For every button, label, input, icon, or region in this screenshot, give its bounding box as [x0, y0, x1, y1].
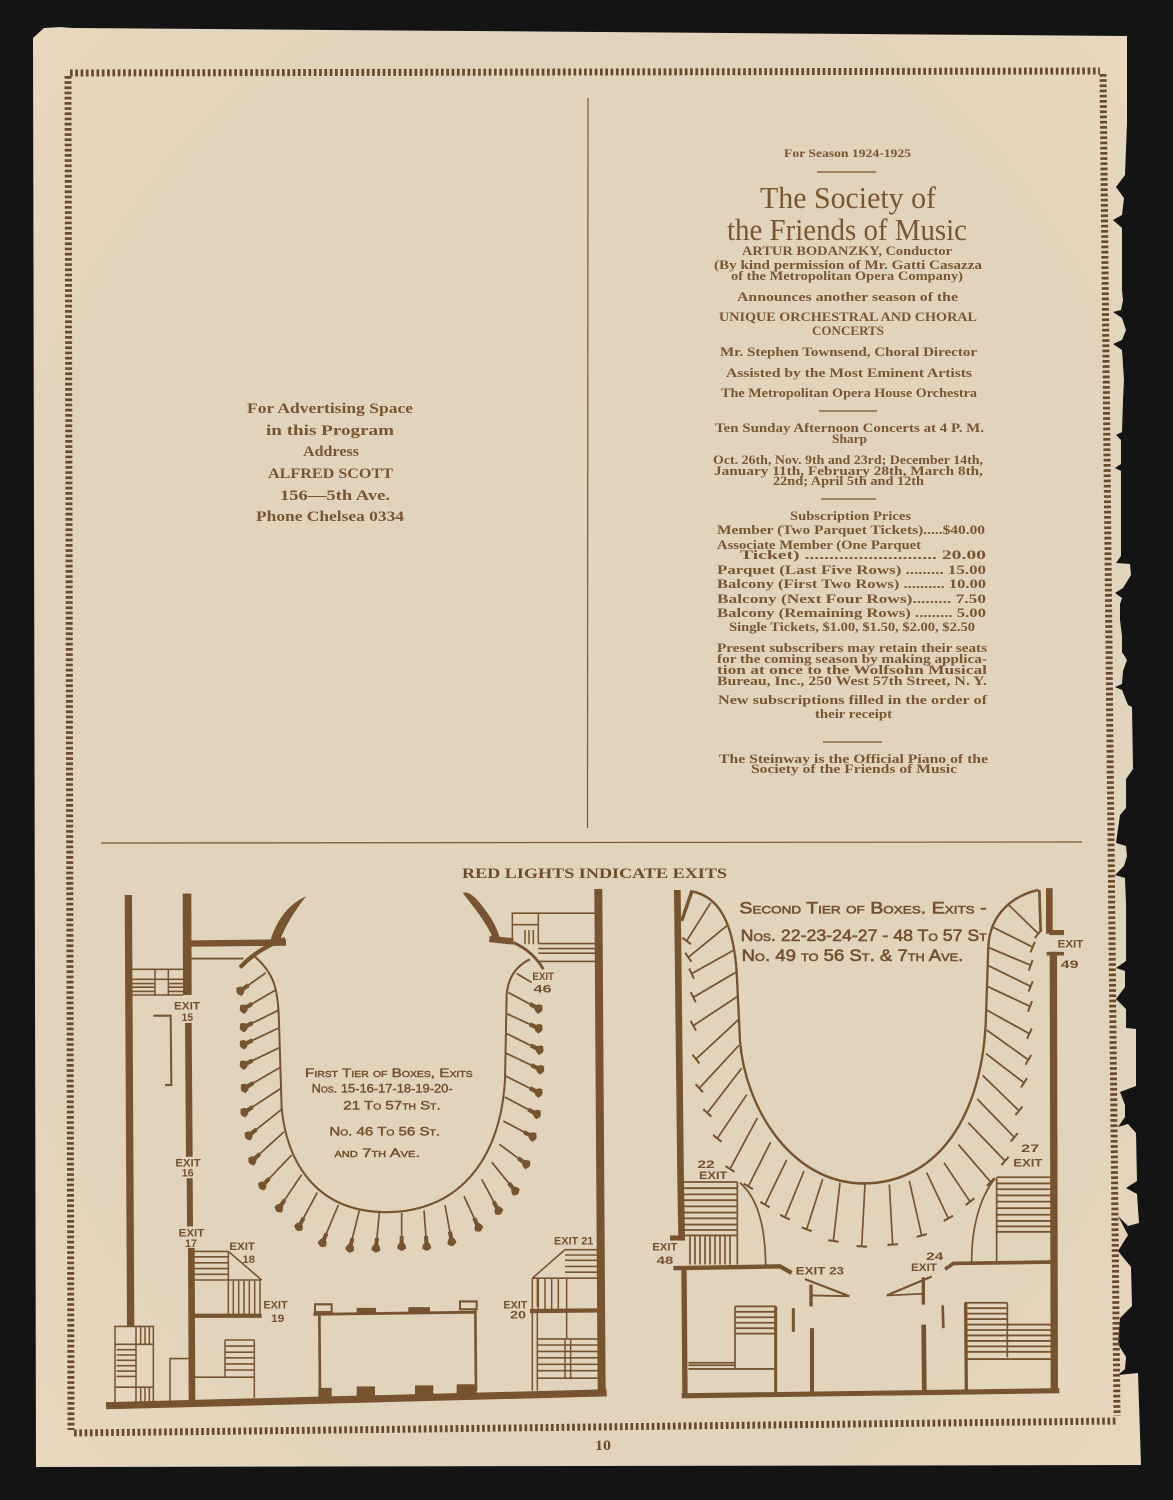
tier caption: Second Tier of Boxes. Exits - [739, 899, 987, 918]
exit labels: EXIT [532, 972, 555, 983]
building walls [670, 888, 1064, 1397]
title: The Society of [760, 180, 937, 215]
panel: advertising notice: Address [303, 444, 359, 460]
concert dates: Sharp [832, 432, 867, 446]
exit labels: 27 [1021, 1143, 1040, 1155]
conductor and programme details [714, 244, 983, 400]
exit labels: 18 [242, 1255, 255, 1266]
exit labels: EXIT [699, 1171, 728, 1182]
Steinway note: The Steinway is the Official Piano of the [719, 752, 989, 766]
tier caption: Nos. 22-23-24-27 - 48 To 57 St [741, 926, 987, 945]
title: the Friends of Music [727, 212, 967, 247]
panel: advertising notice: 156—5th Ave. [280, 488, 390, 504]
tier caption: and 7th Ave. [334, 1146, 420, 1160]
subscriber notice: Present subscribers may retain their seats [717, 641, 987, 655]
exit bars [193, 1310, 600, 1316]
exit labels: EXIT [174, 1001, 201, 1012]
panel: advertising notice: ALFRED SCOTT [268, 466, 393, 482]
exit labels: EXIT 21 [554, 1236, 594, 1247]
exit labels: EXIT [229, 1242, 256, 1253]
Steinway note [719, 752, 989, 776]
exit labels: EXIT [1013, 1158, 1043, 1169]
exit labels: EXIT 23 [796, 1266, 844, 1277]
conductor and programme details: ARTUR BODANZKY, Conductor [742, 244, 953, 258]
chart: second tier floor plan [652, 888, 1084, 1397]
subscription prices: Parquet (Last Five Rows) ......... 15.00 [717, 563, 986, 577]
concert dates: January 11th, February 28th, March 8th, [714, 464, 983, 478]
tier caption: Nos. 15-16-17-18-19-20- [312, 1082, 453, 1096]
tier caption: 21 To 57th St. [343, 1099, 441, 1112]
title [727, 180, 967, 247]
subscriber notice [717, 641, 988, 721]
conductor and programme details: UNIQUE ORCHESTRAL AND CHORAL [719, 310, 977, 324]
tier caption: No. 46 To 56 St. [329, 1125, 440, 1139]
exit labels: EXIT [911, 1263, 938, 1274]
exit labels: EXIT [503, 1300, 528, 1312]
stairways [684, 1177, 1052, 1369]
tier caption: First Tier of Boxes, Exits [305, 1067, 473, 1080]
exit labels: EXIT [263, 1300, 288, 1312]
concert dates: Oct. 26th, Nov. 9th and 23rd; December 14th, [713, 453, 983, 467]
stairways [115, 913, 598, 1404]
concert dates [713, 421, 984, 488]
subscriber notice: tion at once to the Wolfsohn Musical [717, 663, 988, 677]
conductor and programme details: Assisted by the Most Eminent Artists [726, 366, 972, 380]
exit labels [174, 972, 594, 1325]
panel: Society of the Friends of Music announcement [713, 148, 989, 776]
subscription prices: Balcony (First Two Rows) .......... 10.00 [717, 577, 986, 591]
box partitions [687, 903, 1038, 1246]
box partitions with lights [241, 973, 540, 1248]
exit labels: EXIT [175, 1158, 201, 1170]
subscription prices: Subscription Prices [790, 509, 911, 523]
exit labels: 24 [926, 1251, 944, 1263]
concert dates: 22nd; April 5th and 12th [773, 474, 924, 488]
subscription prices: Single Tickets, $1.00, $1.50, $2.00, $2.50 [729, 620, 975, 634]
exit labels: 15 [182, 1013, 193, 1024]
Steinway note: Society of the Friends of Music [751, 762, 958, 776]
page number: 10 [595, 1438, 611, 1454]
panel: advertising notice: in this Program [266, 423, 394, 439]
tier caption [305, 1067, 473, 1160]
horseshoe of boxes [255, 957, 530, 1212]
subscription prices: Balcony (Next Four Rows)......... 7.50 [717, 592, 986, 606]
conductor and programme details: of the Metropolitan Opera Company) [731, 269, 963, 283]
subscriber notice: their receipt [815, 707, 893, 721]
exit labels: 19 [271, 1314, 285, 1325]
subscription prices: Balcony (Remaining Rows) ......... 5.00 [717, 606, 986, 620]
season line: For Season 1924-1925 [784, 148, 911, 160]
subscriber notice: for the coming season by making applica- [717, 652, 987, 666]
exit labels: 16 [182, 1168, 194, 1180]
exit labels: 17 [185, 1239, 197, 1250]
entry passages and partitions [673, 1262, 1053, 1394]
concert dates: Ten Sunday Afternoon Concerts at 4 P. M. [715, 421, 984, 435]
subscriber notice: Bureau, Inc., 250 West 57th Street, N. Y. [717, 674, 987, 688]
subscription prices: Associate Member (One Parquet [717, 538, 922, 552]
central stage block [313, 1301, 477, 1399]
exit labels: 46 [533, 984, 552, 996]
proscenium curves [240, 893, 543, 969]
chart: first tier floor plan [106, 889, 607, 1406]
exit labels: 22 [697, 1160, 715, 1171]
subscription prices: Member (Two Parquet Tickets).....$40.00 [717, 523, 985, 537]
panel: advertising notice [247, 401, 414, 525]
panel: advertising notice: For Advertising Space [247, 401, 414, 417]
short partition by exit 46 [517, 974, 532, 982]
conductor and programme details: Mr. Stephen Townsend, Choral Director [720, 345, 978, 359]
tier caption: No. 49 to 56 St. & 7th Ave. [742, 946, 963, 965]
conductor and programme details: CONCERTS [812, 324, 884, 338]
horseshoe of boxes [690, 890, 1038, 1183]
building walls [106, 889, 607, 1406]
exit labels: 48 [657, 1255, 674, 1267]
exit labels: EXIT [652, 1242, 678, 1254]
subscription prices: Ticket) ........................... 20.00 [740, 548, 986, 562]
panel divider: vertical rule [586, 98, 589, 828]
subscriber notice: New subscriptions filled in the order of [718, 693, 988, 707]
panel divider: horizontal rule [101, 842, 1082, 843]
subscription prices [717, 509, 986, 634]
heading: red lights indicate exits: RED LIGHTS INDICATE EXITS [462, 866, 727, 882]
conductor and programme details: (By kind permission of Mr. Gatti Casazza [714, 258, 983, 272]
exit labels: 49 [1061, 960, 1079, 971]
exit labels: EXIT [1058, 939, 1084, 951]
panel: advertising notice: Phone Chelsea 0334 [256, 509, 404, 525]
exit labels: 20 [510, 1310, 526, 1322]
exit labels: EXIT [179, 1228, 205, 1240]
tier caption [739, 899, 987, 965]
conductor and programme details: Announces another season of the [737, 290, 959, 304]
exit labels [652, 939, 1084, 1277]
conductor and programme details: The Metropolitan Opera House Orchestra [721, 386, 978, 400]
